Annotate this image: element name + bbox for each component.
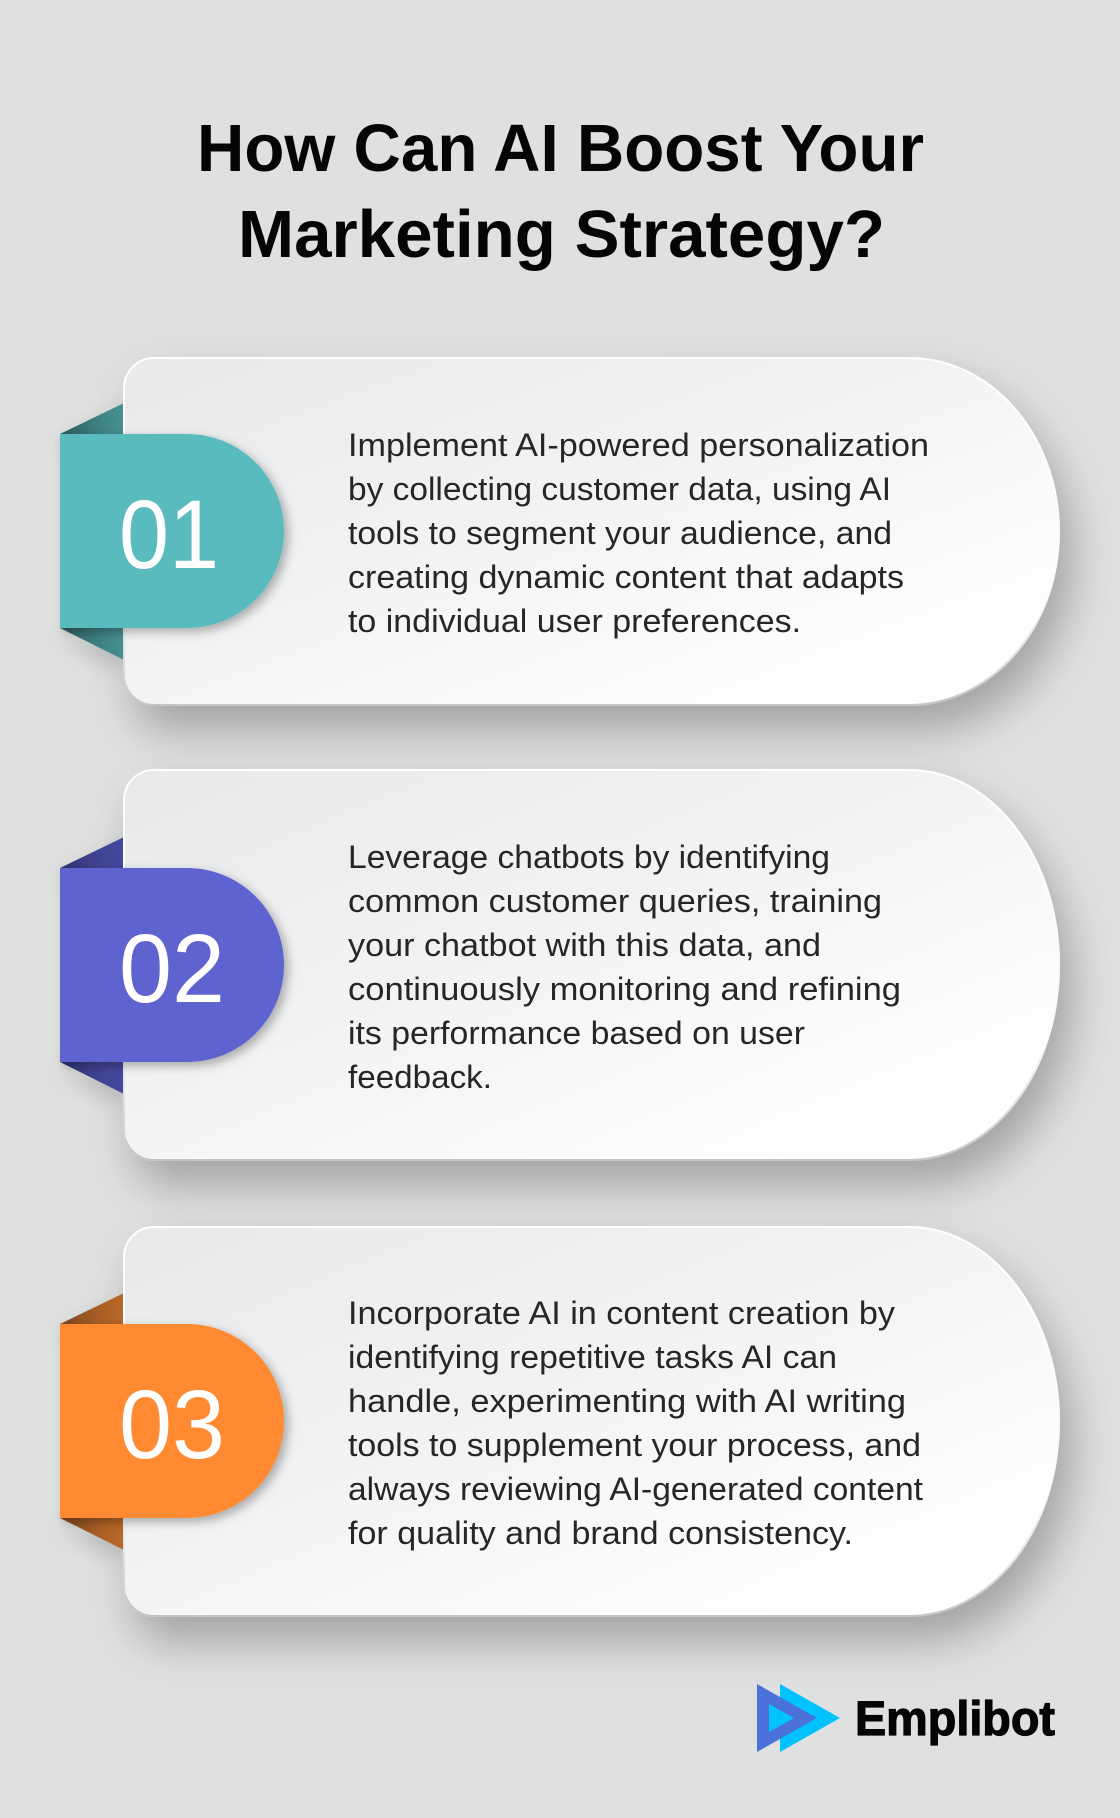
ribbon fold: step 3 <box>60 1293 124 1550</box>
text: step 2: your chatbot with this data, and <box>348 927 821 963</box>
title: How Can AI Boost Your <box>197 111 924 186</box>
number badge: 01 <box>60 434 284 628</box>
number badge: 02: 02 <box>119 914 225 1023</box>
panel: step 1 <box>60 358 1059 705</box>
panel: step 2 <box>60 770 1059 1160</box>
title: Marketing Strategy? <box>238 197 885 272</box>
title <box>197 111 924 272</box>
logo: Emplibot <box>757 1684 1055 1752</box>
number badge: 03: 03 <box>119 1370 225 1479</box>
card: step 3 <box>124 1227 1059 1616</box>
logo: Emplibot: Emplibot <box>855 1693 1055 1746</box>
text: step 1: creating dynamic content that adapts <box>348 559 904 595</box>
card: step 1 <box>124 358 1059 705</box>
text: step 1: by collecting customer data, using AI <box>348 471 891 507</box>
text: step 1: Implement AI-powered personalization <box>348 427 929 463</box>
text: step 3 <box>348 1295 923 1551</box>
text: step 1 <box>348 427 929 639</box>
text: step 3: tools to supplement your process, and <box>348 1427 921 1463</box>
text: step 3: handle, experimenting with AI writing <box>348 1383 906 1419</box>
text: step 3: identifying repetitive tasks AI can <box>348 1339 837 1375</box>
ribbon fold: step 2 <box>60 837 124 1094</box>
text: step 3: for quality and brand consistency. <box>348 1515 853 1551</box>
text: step 1: tools to segment your audience, and <box>348 515 892 551</box>
number badge: 01: 01 <box>119 480 219 589</box>
text: step 3: always reviewing AI-generated content <box>348 1471 923 1507</box>
text: step 2: common customer queries, training <box>348 883 882 919</box>
number badge: 03 <box>60 1324 284 1518</box>
card: step 2 <box>124 770 1059 1160</box>
text: step 2 <box>348 839 901 1095</box>
text: step 2: continuously monitoring and refining <box>348 971 901 1007</box>
text: step 2: its performance based on user <box>348 1015 805 1051</box>
number badge: 02 <box>60 868 284 1062</box>
ribbon fold: step 1 <box>60 403 124 660</box>
icon: play triangles <box>757 1684 840 1752</box>
panel: step 3 <box>60 1227 1059 1616</box>
text: step 2: Leverage chatbots by identifying <box>348 839 830 875</box>
text: step 2: feedback. <box>348 1059 492 1095</box>
text: step 1: to individual user preferences. <box>348 603 801 639</box>
text: step 3: Incorporate AI in content creation by <box>348 1295 895 1331</box>
